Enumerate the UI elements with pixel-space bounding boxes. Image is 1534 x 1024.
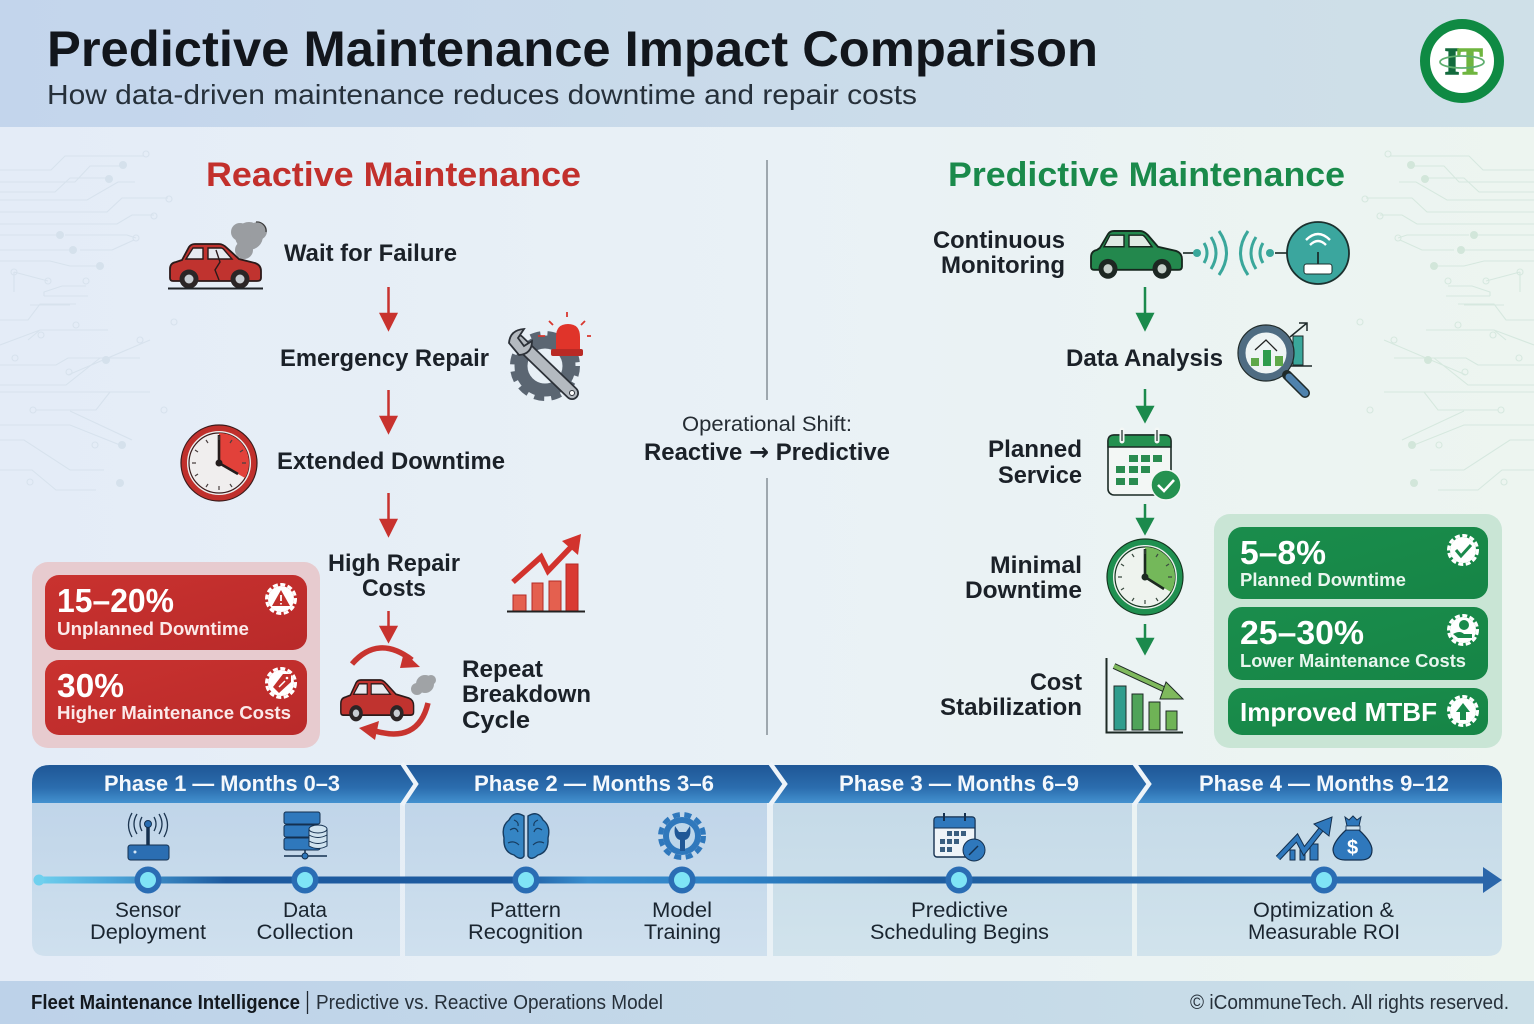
icon: green clock bbox=[1107, 539, 1183, 615]
label: minimal downtime: Minimal bbox=[990, 552, 1082, 579]
divider and operational shift bbox=[644, 160, 890, 735]
label: high repair costs: Costs bbox=[362, 575, 426, 602]
milestone: data collection bbox=[256, 898, 354, 944]
stat card: lower maintenance costs bbox=[1228, 607, 1488, 680]
milestone: predictive scheduling begins bbox=[870, 898, 1049, 944]
title: Predictive Maintenance Impact Comparison bbox=[47, 21, 1098, 77]
icon: check badge bbox=[1448, 536, 1478, 564]
stat card: unplanned downtime: Unplanned Downtime bbox=[57, 618, 249, 639]
label: planned service: Planned bbox=[988, 436, 1082, 463]
label: repeat breakdown cycle bbox=[462, 656, 591, 734]
label: extended downtime: Extended Downtime bbox=[277, 448, 505, 475]
stat card: lower maintenance costs: 25–30% bbox=[1240, 614, 1364, 651]
milestone: optimization and measurable roi: Measurable ROI bbox=[1248, 920, 1400, 944]
stat card: higher maintenance costs bbox=[45, 660, 307, 735]
milestone: sensor deployment bbox=[90, 898, 206, 944]
panel: implementation timeline bbox=[32, 763, 1502, 956]
milestone: pattern recognition bbox=[468, 898, 583, 944]
phase 3 header: Phase 3 — Months 6–9 bbox=[839, 771, 1079, 796]
milestone: data collection: Collection bbox=[256, 920, 354, 944]
footer brand: Fleet Maintenance Intelligence bbox=[31, 992, 300, 1014]
copyright: © iCommuneTech. All rights reserved. bbox=[1190, 992, 1509, 1014]
icon: falling cost chart bbox=[1106, 658, 1183, 732]
icon: growth and money bag bbox=[1278, 816, 1372, 860]
icon: calendar with check bbox=[1108, 430, 1181, 500]
milestone: pattern recognition: Pattern bbox=[490, 898, 561, 922]
label: cost stabilization bbox=[940, 669, 1082, 721]
icon: sensor antenna bbox=[128, 813, 169, 860]
stat card: planned downtime: Planned Downtime bbox=[1240, 569, 1406, 590]
label: data analysis: Data Analysis bbox=[1066, 345, 1223, 372]
footer subtitle: Predictive vs. Reactive Operations Model bbox=[316, 992, 663, 1014]
icon: wrench gear and alarm bbox=[509, 312, 591, 398]
icon: up arrow badge bbox=[1448, 696, 1478, 726]
milestone nodes bbox=[134, 866, 1338, 894]
icon: growth and money bag: $ bbox=[1347, 837, 1358, 859]
icon: gear and wrench bbox=[660, 814, 704, 858]
icon: savings badge bbox=[1448, 616, 1478, 644]
milestone: predictive scheduling begins: Predictive bbox=[911, 898, 1008, 922]
arrow bbox=[1138, 287, 1152, 329]
milestone: pattern recognition: Recognition bbox=[468, 920, 583, 944]
timeline line and arrow bbox=[34, 867, 1502, 893]
phase 2 header: Phase 2 — Months 3–6 bbox=[474, 771, 714, 796]
stat card: lower maintenance costs: Lower Maintenance Costs bbox=[1240, 650, 1466, 671]
header band bbox=[0, 0, 1534, 127]
icon: brain bbox=[503, 814, 549, 858]
arrow bbox=[381, 287, 396, 329]
heading: reactive maintenance: Reactive Maintenance bbox=[206, 156, 581, 194]
milestone: predictive scheduling begins: Scheduling Begins bbox=[870, 920, 1049, 944]
milestone: optimization and measurable roi bbox=[1248, 898, 1400, 944]
icon: schedule calendar bbox=[934, 813, 985, 861]
icon: price tag badge bbox=[266, 668, 296, 698]
icon: broken down car with smoke bbox=[168, 222, 267, 288]
arrow bbox=[381, 611, 396, 641]
label: continuous monitoring: Monitoring bbox=[941, 252, 1065, 279]
logo: I bbox=[1445, 41, 1459, 83]
stat card: higher maintenance costs: 30% bbox=[57, 667, 124, 704]
milestone: data collection: Data bbox=[283, 898, 327, 922]
panel: predictive stats bbox=[1214, 514, 1502, 748]
icon: connected car and wifi hub bbox=[1091, 222, 1349, 284]
panel: reactive stats bbox=[32, 562, 320, 748]
label: repeat breakdown cycle: Repeat bbox=[462, 656, 543, 683]
phase 1 header: Phase 1 — Months 0–3 bbox=[104, 771, 340, 796]
label: planned service bbox=[988, 436, 1082, 489]
label: cost stabilization: Stabilization bbox=[940, 694, 1082, 721]
heading: predictive maintenance: Predictive Maintenance bbox=[948, 156, 1345, 194]
subtitle: How data-driven maintenance reduces downtime and repair costs bbox=[47, 79, 917, 110]
label: planned service: Service bbox=[998, 462, 1082, 489]
reactive to predictive label: Reactive → Predictive bbox=[644, 437, 890, 466]
icon: red clock bbox=[181, 425, 257, 501]
milestone: model training bbox=[644, 898, 721, 944]
label: cost stabilization: Cost bbox=[1030, 669, 1082, 696]
stat card: improved mtbf: Improved MTBF bbox=[1240, 697, 1437, 727]
stat card: planned downtime: 5–8% bbox=[1240, 534, 1326, 571]
arrow bbox=[381, 390, 396, 432]
milestone: optimization and measurable roi: Optimization & bbox=[1253, 898, 1394, 922]
stat card: unplanned downtime: 15–20% bbox=[57, 582, 174, 619]
label: minimal downtime: Downtime bbox=[965, 577, 1082, 604]
label: minimal downtime bbox=[965, 552, 1082, 604]
stat card: higher maintenance costs: Higher Maintenance Costs bbox=[57, 702, 291, 723]
operational shift label: Operational Shift: bbox=[682, 413, 852, 436]
arrow bbox=[1138, 624, 1152, 653]
stat card: improved mtbf bbox=[1228, 688, 1488, 735]
label: wait for failure: Wait for Failure bbox=[284, 240, 457, 267]
milestone: model training: Training bbox=[644, 920, 721, 944]
arrow bbox=[1138, 389, 1152, 421]
icon: rising cost chart bbox=[507, 534, 585, 612]
milestone: model training: Model bbox=[652, 898, 712, 922]
stat card: unplanned downtime bbox=[45, 575, 307, 650]
icon: server and database bbox=[284, 812, 327, 859]
logo bbox=[1425, 24, 1499, 98]
label: continuous monitoring: Continuous bbox=[933, 227, 1065, 254]
icon: warning badge bbox=[266, 584, 296, 614]
panel: predictive flow bbox=[933, 222, 1349, 732]
label: high repair costs: High Repair bbox=[328, 550, 460, 577]
milestone: sensor deployment: Deployment bbox=[90, 920, 206, 944]
label: continuous monitoring bbox=[933, 227, 1065, 279]
label: high repair costs bbox=[328, 550, 460, 602]
label: repeat breakdown cycle: Cycle bbox=[462, 707, 530, 734]
label: emergency repair: Emergency Repair bbox=[280, 345, 489, 372]
footer band bbox=[0, 981, 1534, 1024]
phase 4 header: Phase 4 — Months 9–12 bbox=[1199, 771, 1449, 796]
milestone: sensor deployment: Sensor bbox=[115, 898, 181, 922]
icon: magnifier with chart bbox=[1238, 323, 1312, 393]
arrow bbox=[1138, 504, 1152, 533]
arrow bbox=[381, 493, 396, 535]
panel: reactive flow bbox=[168, 222, 591, 740]
stat card: planned downtime bbox=[1228, 527, 1488, 599]
icon: repeat breakdown cycle bbox=[341, 648, 436, 740]
label: repeat breakdown cycle: Breakdown bbox=[462, 681, 591, 708]
logo: T bbox=[1457, 41, 1483, 83]
